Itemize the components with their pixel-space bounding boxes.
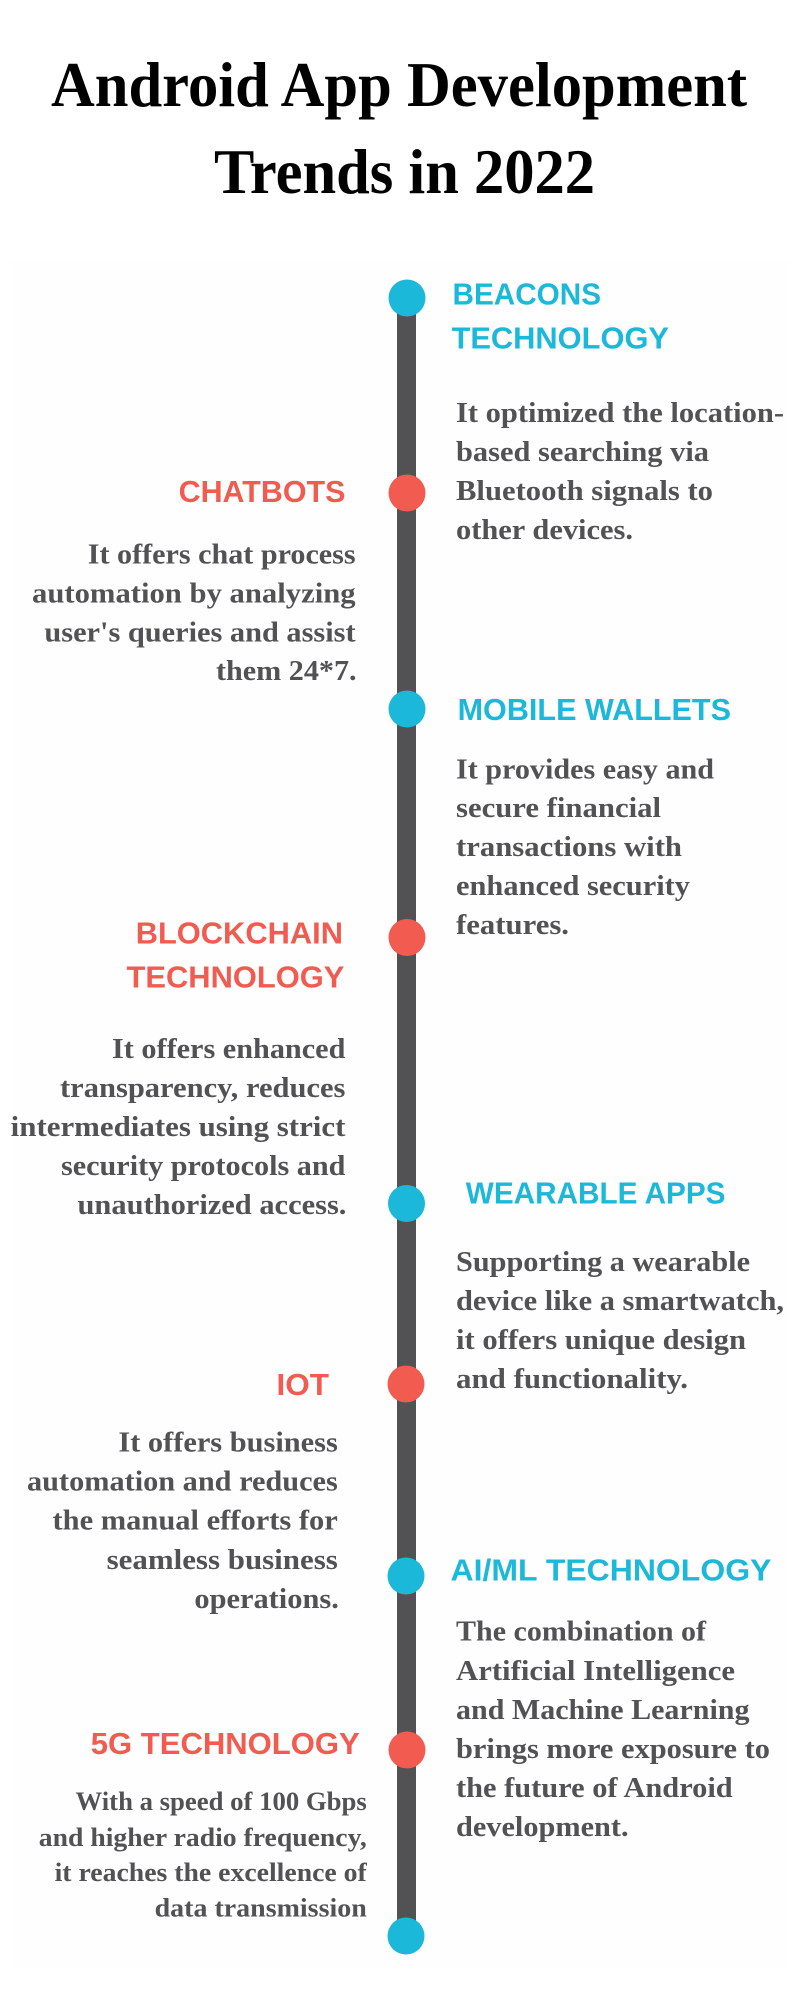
text: ai/ml description: the future of Android — [456, 1773, 733, 1804]
marker: chatbots — [388, 474, 426, 512]
title: Android App Development — [51, 49, 748, 120]
marker: beacons technology — [388, 280, 426, 316]
text: ai/ml description: brings more exposure to — [456, 1734, 770, 1765]
panel: beacons technology — [452, 276, 784, 546]
heading: blockchain technology: TECHNOLOGY — [126, 959, 345, 994]
text: chatbots description: them 24*7. — [216, 656, 357, 687]
panel: chatbots — [32, 474, 357, 687]
text: chatbots description: automation by analyzing — [32, 579, 356, 610]
text: iot description: seamless business — [107, 1545, 338, 1576]
text: ai/ml description: The combination of — [456, 1617, 707, 1648]
marker: wearable apps — [388, 1185, 425, 1222]
title: Trends in 2022 — [214, 136, 595, 207]
text: mobile wallets description: secure financial — [456, 793, 661, 824]
text: 5g description: data transmission — [155, 1893, 367, 1923]
heading: blockchain technology: BLOCKCHAIN — [136, 916, 343, 951]
heading: iot: IOT — [276, 1367, 329, 1402]
marker: ai/ml technology — [388, 1558, 424, 1594]
text: mobile wallets description: transactions with — [456, 832, 682, 863]
heading: chatbots: CHATBOTS — [179, 474, 345, 509]
text: blockchain description: transparency, reduces — [60, 1073, 346, 1104]
panel: 5g technology — [39, 1726, 368, 1923]
text: wearable apps description: it offers unique design — [456, 1325, 746, 1356]
text: chatbots description — [32, 539, 357, 687]
panel: mobile wallets — [456, 692, 731, 941]
text: mobile wallets description: enhanced security — [456, 871, 690, 902]
panel: ai/ml technology — [450, 1552, 772, 1843]
heading: wearable apps: WEARABLE APPS — [466, 1176, 726, 1210]
text: wearable apps description — [456, 1247, 784, 1395]
heading: ai/ml technology: AI/ML TECHNOLOGY — [450, 1552, 772, 1587]
timeline bar — [397, 298, 416, 1936]
text: mobile wallets description: features. — [456, 910, 569, 941]
text: iot description — [27, 1428, 339, 1615]
heading: 5g technology: 5G TECHNOLOGY — [91, 1726, 360, 1761]
text: iot description: automation and reduces — [27, 1467, 338, 1498]
marker: timeline end — [388, 1918, 424, 1954]
text: chatbots description: user's queries and assist — [44, 618, 356, 648]
text: ai/ml description: and Machine Learning — [456, 1695, 750, 1726]
timeline — [388, 280, 426, 1954]
text: iot description: operations. — [194, 1584, 339, 1615]
marker: mobile wallets — [388, 690, 426, 728]
text: ai/ml description — [456, 1617, 770, 1843]
text: beacons description: other devices. — [456, 515, 633, 546]
heading: beacons technology: TECHNOLOGY — [452, 320, 669, 356]
text: ai/ml description: Artificial Intelligence — [456, 1656, 735, 1687]
text: 5g description: it reaches the excellence of — [55, 1857, 368, 1887]
text: beacons description: It optimized the location- — [456, 398, 784, 429]
heading: blockchain technology — [126, 916, 345, 994]
text: beacons description — [456, 398, 784, 546]
marker: blockchain technology — [388, 919, 426, 956]
text: blockchain description — [11, 1034, 346, 1221]
marker: iot — [388, 1366, 424, 1402]
text: blockchain description: unauthorized access. — [78, 1190, 346, 1221]
text: beacons description: Bluetooth signals to — [456, 476, 713, 507]
text: blockchain description: security protocols and — [61, 1151, 346, 1182]
marker: 5g technology — [388, 1732, 426, 1768]
heading: beacons technology: BEACONS — [452, 276, 601, 312]
text: 5g description — [39, 1786, 368, 1923]
text: mobile wallets description — [456, 755, 714, 941]
text: ai/ml description: development. — [456, 1812, 629, 1843]
text: wearable apps description: and functionality. — [456, 1364, 688, 1395]
text: wearable apps description: Supporting a wearable — [456, 1247, 750, 1278]
text: wearable apps description: device like a smartwatch, — [456, 1286, 784, 1317]
text: blockchain description: It offers enhanced — [112, 1034, 346, 1065]
panel: wearable apps — [456, 1176, 784, 1395]
text: iot description: the manual efforts for — [52, 1506, 338, 1537]
panel: iot — [27, 1367, 339, 1615]
heading: mobile wallets: MOBILE WALLETS — [458, 692, 731, 727]
title — [51, 49, 748, 207]
text: chatbots description: It offers chat process — [88, 539, 356, 570]
text: mobile wallets description: It provides easy and — [456, 755, 714, 786]
text: blockchain description: intermediates using strict — [11, 1112, 346, 1143]
panel: blockchain technology — [11, 916, 346, 1221]
text: iot description: It offers business — [118, 1428, 338, 1459]
text: beacons description: based searching via — [456, 437, 709, 468]
heading: beacons technology — [452, 276, 669, 356]
text: 5g description: and higher radio frequency, — [39, 1822, 367, 1852]
text: 5g description: With a speed of 100 Gbps — [76, 1786, 367, 1816]
